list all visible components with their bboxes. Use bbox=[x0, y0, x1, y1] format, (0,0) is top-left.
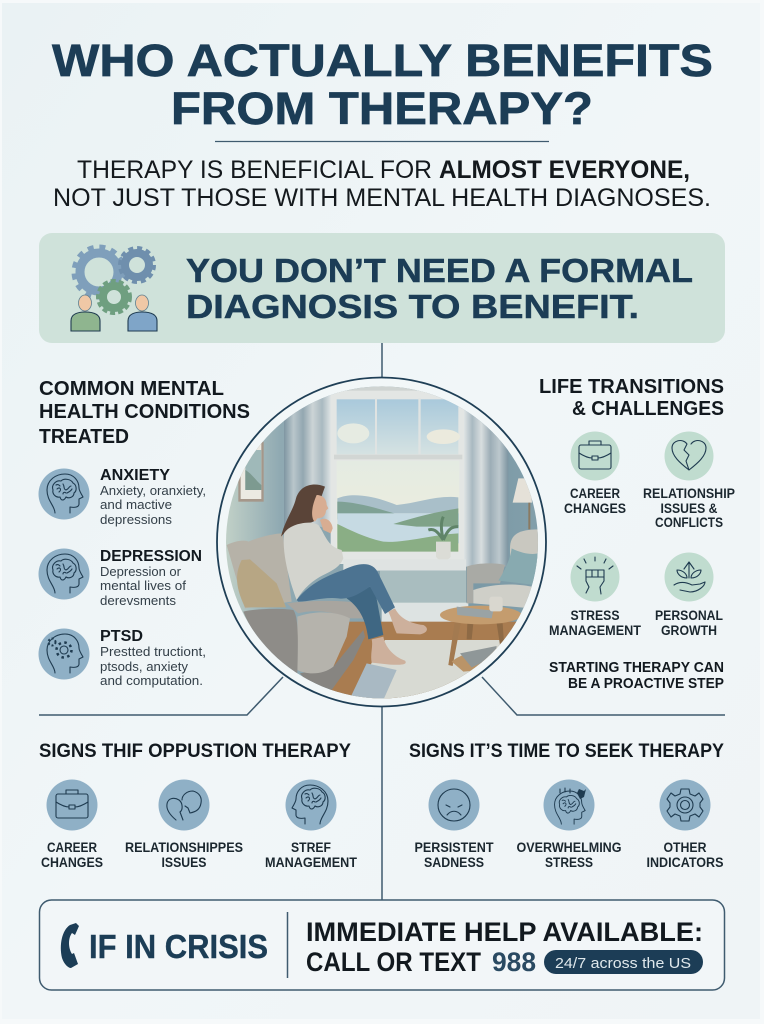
immediate help text: CALL OR TEXT bbox=[306, 947, 481, 977]
icon: raised fist bbox=[570, 552, 620, 602]
icon: depression head bbox=[38, 548, 90, 600]
plant bbox=[428, 517, 458, 540]
conditions heading bbox=[39, 377, 250, 448]
availability pill bbox=[544, 950, 703, 974]
panel: formal diagnosis banner bbox=[39, 233, 725, 343]
proactive step note: BE A PROACTIVE STEP bbox=[568, 675, 724, 692]
stress management label: MANAGEMENT bbox=[549, 623, 642, 638]
anxiety text bbox=[100, 467, 206, 527]
icon: gear bbox=[660, 780, 710, 830]
stress management label bbox=[549, 608, 642, 638]
relationships issues label bbox=[125, 840, 243, 870]
icon: overwhelmed head bbox=[544, 780, 594, 830]
career changes label bbox=[41, 840, 103, 870]
panel: signs it's time to seek therapy bbox=[409, 741, 724, 870]
depression text: derevsments bbox=[100, 593, 177, 608]
immediate help text: IMMEDIATE HELP AVAILABLE: bbox=[306, 917, 703, 947]
life transitions heading bbox=[539, 375, 724, 420]
personal growth label bbox=[655, 608, 723, 638]
other indicators label: OTHER bbox=[664, 840, 707, 855]
icon: head with brain bbox=[286, 780, 336, 830]
PTSD text: ptsods, anxiety bbox=[100, 659, 189, 674]
anxiety text: ANXIETY bbox=[100, 467, 171, 484]
relationship issues label bbox=[643, 486, 735, 530]
anxiety text: depressions bbox=[100, 512, 173, 527]
relationships issues label: RELATIONSHIPPES bbox=[125, 840, 243, 855]
banner text: DIAGNOSIS TO BENEFIT. bbox=[186, 288, 639, 325]
left bottom heading: SIGNS THIF OPPUSTION THERAPY bbox=[39, 741, 351, 762]
anxiety text: and mactive bbox=[100, 497, 172, 512]
banner text bbox=[186, 252, 693, 325]
lamp bbox=[513, 478, 532, 503]
life transitions heading: LIFE TRANSITIONS bbox=[539, 375, 724, 398]
panel: signs this opposition therapy bbox=[39, 741, 358, 870]
career changes label bbox=[564, 486, 626, 516]
icon: gears and people bbox=[71, 247, 157, 331]
woman bbox=[281, 484, 325, 537]
sill and lower wall bbox=[343, 559, 466, 571]
career changes label: CAREER bbox=[47, 840, 97, 855]
subtitle: THERAPY IS BENEFICIAL FOR bbox=[77, 156, 432, 184]
icon: broken heart bbox=[664, 432, 714, 480]
relationship issues label: ISSUES & bbox=[660, 501, 718, 516]
banner text: YOU DON’T NEED A FORMAL bbox=[186, 252, 693, 289]
overwhelming stress label: OVERWHELMING bbox=[516, 840, 622, 855]
anxiety text: Anxiety, oranxiety, bbox=[100, 483, 206, 498]
overwhelming stress label: STRESS bbox=[545, 855, 593, 870]
floor bbox=[330, 622, 516, 698]
depression text: mental lives of bbox=[100, 578, 186, 593]
persistent sadness label: SADNESS bbox=[424, 855, 484, 870]
panel: common mental health conditions bbox=[38, 377, 250, 688]
stref management label bbox=[265, 840, 358, 870]
career changes label: CHANGES bbox=[564, 501, 626, 516]
title: FROM THERAPY? bbox=[171, 83, 593, 134]
proactive step note bbox=[549, 659, 724, 692]
if in crisis: IF IN CRISIS bbox=[89, 928, 268, 965]
career changes label: CAREER bbox=[570, 486, 620, 501]
life transitions heading: & CHALLENGES bbox=[572, 397, 724, 420]
icon: PTSD head with gears bbox=[38, 628, 90, 680]
conditions heading: HEALTH CONDITIONS bbox=[39, 400, 250, 423]
subtitle: ALMOST EVERYONE, bbox=[439, 156, 690, 184]
armchair bbox=[510, 529, 538, 556]
picture bbox=[238, 442, 264, 502]
PTSD text: PTSD bbox=[100, 628, 143, 645]
title: WHO ACTUALLY BENEFITS bbox=[52, 35, 713, 86]
coffee table bbox=[448, 640, 458, 666]
PTSD text bbox=[100, 628, 206, 688]
PTSD text: Prestted tructiont, bbox=[100, 644, 206, 659]
photo: woman looking out of a window bbox=[217, 378, 546, 706]
curtains bbox=[284, 393, 332, 533]
other indicators label bbox=[646, 840, 724, 870]
depression text: DEPRESSION bbox=[100, 548, 202, 565]
icon: sad face bbox=[428, 780, 480, 830]
relationship issues label: RELATIONSHIP bbox=[643, 486, 735, 501]
persistent sadness label: PERSISTENT bbox=[414, 840, 494, 855]
panel: life transitions and challenges bbox=[539, 375, 735, 692]
depression text: Depression or bbox=[100, 564, 182, 579]
icon: anxiety head bbox=[38, 468, 90, 520]
career changes label: CHANGES bbox=[41, 855, 103, 870]
overwhelming stress label bbox=[516, 840, 622, 870]
stref management label: STREF bbox=[291, 840, 331, 855]
subtitle: NOT JUST THOSE WITH MENTAL HEALTH DIAGNOSES. bbox=[53, 184, 711, 212]
icon: briefcase bbox=[570, 432, 620, 480]
window bbox=[331, 391, 464, 564]
immediate help text: 988 bbox=[492, 947, 536, 977]
personal growth label: PERSONAL bbox=[655, 608, 723, 623]
personal growth label: GROWTH bbox=[661, 623, 717, 638]
icon: two faces bbox=[158, 780, 210, 830]
icon: briefcase bbox=[46, 780, 98, 830]
stress management label: STRESS bbox=[570, 608, 620, 623]
relationship issues label: CONFLICTS bbox=[655, 515, 723, 530]
conditions heading: COMMON MENTAL bbox=[39, 377, 224, 400]
sofa bbox=[227, 533, 292, 608]
persistent sadness label bbox=[414, 840, 494, 870]
depression text bbox=[100, 548, 202, 608]
stref management label: MANAGEMENT bbox=[265, 855, 358, 870]
availability pill: 24/7 across the US bbox=[555, 955, 691, 972]
title bbox=[52, 35, 713, 134]
proactive step note: STARTING THERAPY CAN bbox=[549, 659, 724, 676]
PTSD text: and computation. bbox=[100, 673, 203, 688]
icon: phone bbox=[61, 923, 79, 968]
right bottom heading: SIGNS IT’S TIME TO SEEK THERAPY bbox=[409, 741, 724, 762]
conditions heading: TREATED bbox=[39, 425, 129, 448]
icon: hand with growing plant bbox=[664, 552, 714, 602]
panel: crisis help bbox=[40, 900, 724, 990]
immediate help text bbox=[306, 917, 703, 977]
relationships issues label: ISSUES bbox=[162, 855, 206, 870]
subtitle bbox=[53, 156, 711, 212]
other indicators label: INDICATORS bbox=[646, 855, 724, 870]
